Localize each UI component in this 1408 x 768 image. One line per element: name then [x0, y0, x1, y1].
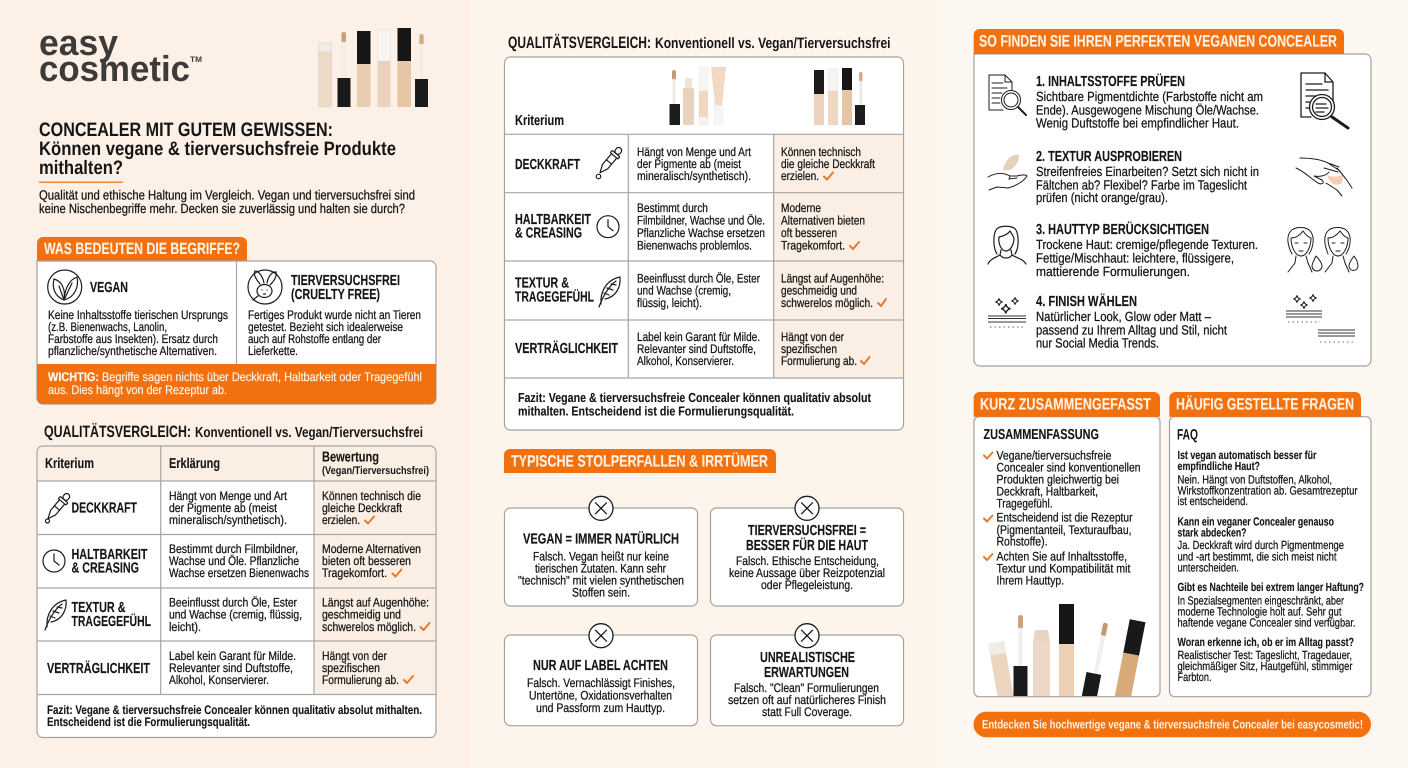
title: Können vegane & tierversuchsfreie Produkte: [39, 138, 396, 160]
table header: Erklärung: [169, 456, 220, 472]
row: texture: schwerelos möglich.: [781, 296, 873, 310]
row: tolerance: Label kein Garant für Milde.: [169, 649, 296, 663]
row: durability: Wachse ersetzen Bienenwachs: [169, 566, 309, 580]
conclusion: [47, 703, 422, 729]
FAQ 3: In Spezialsegmenten eingeschränkt, aber: [1178, 593, 1344, 607]
FAQ 1: ist entscheidend.: [1178, 494, 1248, 508]
FAQ 2: Kann ein veganer Concealer genauso: [1178, 515, 1334, 529]
FAQ 3: moderne Technologie holt auf. Sehr gut: [1178, 605, 1342, 619]
panel: FAQ: [1169, 392, 1371, 697]
table: quality comparison: [37, 446, 436, 738]
term: cruelty free: [248, 273, 421, 358]
card: unrealistic expectations: statt Full Coverage.: [762, 705, 852, 719]
card: unrealistic expectations: Falsch. "Clean" Formulierungen: [734, 681, 879, 695]
step 4: 4. FINISH WÄHLEN: [1036, 293, 1137, 310]
product photo: concealers in summary: [988, 604, 1145, 705]
icon: testing cream on skin: [1296, 158, 1352, 196]
row: texture: Längst auf Augenhöhe:: [322, 596, 429, 610]
heading: quality comparison: QUALITÄTSVERGLEICH:: [44, 422, 191, 441]
row: durability: HALTBARKEIT: [515, 212, 591, 228]
step 1: Ende). Ausgewogene Mischung Öle/Wachse.: [1036, 102, 1259, 117]
row: coverage: die gleiche Deckkraft: [781, 157, 875, 171]
card: vegan = natural: Falsch. Vegan heißt nur keine: [533, 549, 669, 563]
FAQ 2: unterscheiden.: [1178, 561, 1239, 575]
summary point 3: Textur und Kompatibilität mit: [996, 562, 1131, 576]
card: cruelty free = better for skin: keine Aussage über Reizpotenzial: [729, 566, 885, 580]
row: texture: und Wachse (cremig,: [637, 284, 731, 298]
summary heading: ZUSAMMENFASSUNG: [984, 427, 1099, 443]
card: unrealistic expectations: setzen oft auf natürlicheres Finish: [728, 693, 886, 707]
step 2: Fältchen ab? Flexibel? Farbe im Tageslicht: [1036, 177, 1247, 192]
icon: dropper: [596, 145, 624, 179]
icon: finish right: [1286, 294, 1355, 342]
row: coverage: [44, 489, 421, 527]
term: cruelty free: TIERVERSUCHSFREI: [291, 273, 400, 289]
FAQ 4: Realistischer Test: Tageslicht, Tragedauer,: [1178, 648, 1352, 662]
conclusion: Entscheidend ist die Formulierungsqualität.: [47, 715, 250, 729]
row: coverage: DECKKRAFT: [72, 501, 137, 517]
panel: terms: [37, 237, 436, 404]
summary point 3: Ihrem Hauttyp.: [996, 574, 1064, 588]
step 2: Streifenfreies Einarbeiten? Setzt sich nicht in: [1036, 164, 1259, 179]
FAQ 2: stark abdecken?: [1178, 526, 1246, 540]
card: only the label: Untertöne, Oxidationsverhalten: [529, 688, 672, 702]
table header: (Vegan/Tierversuchsfrei): [322, 465, 429, 477]
row: tolerance: spezifischen: [781, 342, 837, 356]
FAQ 1: empfindliche Haut?: [1178, 459, 1260, 473]
logo: easycosmetic: TM: [190, 55, 202, 64]
row: durability: bieten oft besseren: [322, 554, 411, 568]
card: cruelty free = better for skin: [710, 496, 904, 606]
term: vegan: VEGAN: [90, 280, 128, 296]
row: coverage: der Pigmente ab (meist: [637, 157, 741, 171]
step 2: [1036, 149, 1259, 205]
card: cruelty free = better for skin: Falsch. Ethische Entscheidung,: [736, 554, 879, 568]
card: vegan = natural: [504, 496, 698, 606]
section tab: summary: [974, 392, 1160, 417]
section tab: terms: WAS BEDEUTEN DIE BEGRIFFE?: [44, 240, 240, 258]
icon: finish left: [988, 297, 1026, 327]
term: vegan: pflanzliche/synthetische Alternativen.: [48, 344, 217, 358]
icon: feather: [45, 600, 66, 630]
summary point 2: [984, 511, 1132, 549]
row: durability: Alternativen bieten: [781, 214, 865, 228]
term: vegan: (z.B. Bienenwachs, Lanolin,: [48, 320, 167, 334]
row: durability: Tragekomfort.: [781, 238, 845, 252]
product photo: conventional concealers: [670, 67, 726, 125]
card: only the label: Falsch. Vernachlässigt Finishes,: [527, 676, 675, 690]
summary point 1: Tragegefühl.: [996, 496, 1052, 510]
table header: [45, 450, 429, 477]
row: coverage: gleiche Deckkraft: [322, 501, 402, 515]
row: tolerance: Alkohol, Konservierer.: [637, 354, 734, 368]
step 3: mattierende Formulierungen.: [1036, 264, 1190, 279]
icon: feather: [599, 277, 620, 307]
FAQ 2: und -art bestimmt, die sich meist nicht: [1178, 550, 1337, 564]
icon: cross: [795, 624, 819, 648]
summary point 1: Produkten gleichwertig bei: [996, 472, 1119, 486]
summary point 2: Rohstoffe).: [996, 535, 1048, 549]
summary point 2: (Pigmentanteil, Texturaufbau,: [996, 523, 1132, 537]
FAQ 4: Farbton.: [1178, 670, 1212, 684]
row: durability: HALTBARKEIT: [72, 547, 148, 563]
row: tolerance: spezifischen: [322, 661, 380, 675]
card: cruelty free = better for skin: BESSER FÜR DIE HAUT: [746, 537, 868, 554]
row: tolerance: Alkohol, Konservierer.: [169, 673, 269, 687]
row: texture: leicht).: [169, 620, 201, 634]
term: cruelty free: Lieferkette.: [248, 344, 298, 358]
FAQ 3: haftende vegane Concealer sind verfügbar.: [1178, 616, 1356, 630]
row: tolerance: [47, 649, 413, 687]
table header: Kriterium: [45, 456, 94, 472]
row: durability: Bestimmt durch: [637, 201, 708, 215]
card: unrealistic expectations: UNREALISTISCHE: [760, 650, 855, 666]
background: left column: [0, 0, 470, 768]
card: vegan = natural: VEGAN = IMMER NATÜRLICH: [523, 530, 679, 547]
FAQ 1: [1178, 448, 1358, 508]
row: durability: Wachse und Öle. Pflanzliche: [169, 554, 299, 568]
step 3: Fettige/Mischhaut: leichtere, flüssigere,: [1036, 250, 1234, 265]
row: texture: TEXTUR &: [515, 276, 569, 292]
summary point 1: Concealer sind konventionellen: [996, 461, 1141, 475]
row: durability: Bienenwachs problemlos.: [637, 238, 752, 252]
row: texture: geschmeidig und: [781, 284, 857, 298]
icon: dropper: [44, 491, 72, 523]
FAQ 4: Woran erkenne ich, ob er im Alltag passt?: [1178, 635, 1354, 649]
icon: cross: [589, 624, 613, 648]
row: texture: schwerelos möglich.: [322, 620, 416, 634]
heading: quality comparison: [44, 422, 423, 441]
title: CONCEALER MIT GUTEM GEWISSEN:: [39, 119, 333, 141]
card: vegan = natural: "technisch" mit vielen synthetischen: [518, 574, 684, 588]
card: unrealistic expectations: ERWARTUNGEN: [764, 665, 849, 681]
row: texture: und Wachse (cremig, flüssig,: [169, 608, 302, 622]
logo: easycosmetic: easy: [39, 22, 118, 63]
row: texture: Beeinflusst durch Öle, Ester: [637, 272, 760, 286]
icon: cross: [589, 496, 613, 520]
intro text: keine Nischenbegriffe mehr. Decken sie zuverlässig und halten sie durch?: [39, 201, 405, 216]
icon: cream on hand: [988, 155, 1027, 190]
FAQ heading: FAQ: [1177, 426, 1198, 443]
summary point 3: [984, 550, 1131, 588]
section tab: FAQ: HÄUFIG GESTELLTE FRAGEN: [1176, 395, 1354, 413]
row: texture: flüssig, leicht).: [637, 296, 702, 310]
FAQ 2: Ja. Deckkraft wird durch Pigmentmenge: [1178, 538, 1344, 552]
intro text: [39, 188, 415, 216]
row: tolerance: Relevanter sind Duftstoffe,: [169, 661, 293, 675]
step 1: 1. INHALTSSTOFFE PRÜFEN: [1036, 73, 1185, 90]
card: cruelty free = better for skin: oder Pflegeleistung.: [761, 578, 853, 592]
row: tolerance: Label kein Garant für Milde.: [637, 330, 760, 344]
FAQ 4: [1178, 635, 1354, 684]
row: durability: oft besseren: [781, 226, 837, 240]
heading: quality comparison: [508, 33, 890, 52]
row: coverage: Hängt von Menge und Art: [637, 145, 751, 159]
product photo: concealer row: [318, 28, 428, 107]
summary point 3: Achten Sie auf Inhaltsstoffe,: [996, 550, 1127, 564]
FAQ 3: [1178, 580, 1364, 630]
term: cruelty free: auch auf Rohstoffe entlang der: [248, 332, 381, 346]
table: quality comparison with products: [504, 57, 904, 430]
step 4: nur Social Media Trends.: [1036, 336, 1159, 351]
logo: easycosmetic: [39, 22, 202, 89]
card: cruelty free = better for skin: TIERVERSUCHSFREI =: [748, 523, 866, 539]
summary point 2: Entscheidend ist die Rezeptur: [996, 511, 1132, 525]
step 2: 2. TEXTUR AUSPROBIEREN: [1036, 149, 1182, 165]
row: texture: TEXTUR &: [72, 600, 126, 616]
card: only the label: NUR AUF LABEL ACHTEN: [533, 658, 668, 674]
background: middle column: [470, 0, 940, 768]
title: [39, 119, 396, 179]
row: tolerance: Formulierung ab.: [322, 673, 399, 687]
row: tolerance: Hängt von der: [322, 649, 387, 663]
icon: clock: [43, 550, 65, 572]
heading: quality comparison: QUALITÄTSVERGLEICH:: [508, 33, 651, 52]
row: durability: [515, 201, 865, 252]
row: tolerance: VERTRÄGLICHKEIT: [515, 340, 618, 357]
call to action: [974, 712, 1371, 737]
row: texture: TRAGEGEFÜHL: [72, 613, 151, 630]
row: durability: Pflanzliche Wachse ersetzen: [637, 226, 765, 240]
row: durability: Moderne: [781, 201, 821, 215]
icon: woman: [988, 226, 1026, 264]
summary point 1: [984, 449, 1141, 510]
icon: document with magnifier large: [1301, 73, 1348, 128]
step 1: Wenig Duftstoffe bei empfindlicher Haut.: [1036, 115, 1239, 130]
conclusion: Fazit: Vegane & tierversuchsfreie Concealer können qualitativ absolut mithalten.: [47, 703, 422, 717]
step 3: 3. HAUTTYP BERÜCKSICHTIGEN: [1036, 221, 1209, 238]
term: vegan: Keine Inhaltsstoffe tierischen Ursprungs: [48, 308, 228, 322]
section tab: finding: [974, 29, 1344, 54]
conclusion: [518, 390, 872, 419]
header cell: criterion: Kriterium: [515, 113, 564, 129]
row: tolerance: Hängt von der: [781, 330, 844, 344]
card: unrealistic expectations: [710, 624, 904, 726]
row: coverage: mineralisch/synthetisch).: [169, 513, 287, 527]
card: vegan = natural: Stoffen sein.: [572, 586, 630, 600]
step 3: Trockene Haut: cremige/pflegende Texturen.: [1036, 237, 1258, 252]
step 4: passend zu Ihrem Alltag und Stil, nicht: [1036, 322, 1227, 337]
panel: summary: [974, 392, 1160, 705]
row: durability: Bestimmt durch Filmbildner,: [169, 542, 298, 556]
row: durability: & CREASING: [72, 561, 139, 577]
row: texture: Längst auf Augenhöhe:: [781, 272, 884, 286]
step 2: prüfen (nicht orange/grau).: [1036, 190, 1168, 205]
card: only the label: [504, 624, 698, 726]
icon: vegan leaf: [48, 270, 82, 304]
row: coverage: der Pigmente ab (meist: [169, 501, 277, 515]
panel: finding your concealer: [974, 29, 1371, 366]
FAQ 1: Wirkstoffkonzentration ab. Gesamtrezeptur: [1178, 483, 1358, 497]
intro text: Qualität und ethische Haltung im Vergleich. Vegan und tierversuchsfrei sind: [39, 188, 415, 202]
row: durability: Tragekomfort.: [322, 566, 387, 580]
logo: easycosmetic: cosmetic: [39, 48, 190, 89]
conclusion: mithalten. Entscheidend ist die Formulierungsqualität.: [518, 404, 794, 419]
row: durability: & CREASING: [515, 226, 582, 242]
term: cruelty free: Fertiges Produkt wurde nicht an Tieren: [248, 308, 421, 322]
term: cruelty free: (CRUELTY FREE): [291, 287, 380, 303]
product photo: vegan concealers: [814, 68, 865, 125]
panel: middle column: [504, 33, 904, 726]
row: durability: Moderne Alternativen: [322, 542, 421, 556]
FAQ 4: gleichmäßiger Sitz, Hautgefühl, stimmiger: [1178, 659, 1353, 673]
row: coverage: Können technisch die: [322, 489, 421, 503]
step 1: Sichtbare Pigmentdichte (Farbstoffe nicht am: [1036, 89, 1263, 104]
callout: important: [37, 364, 436, 404]
row: texture: TRAGEGEFÜHL: [515, 289, 594, 306]
icon: two skin types: [1288, 228, 1358, 272]
term: cruelty free: getestet. Bezieht sich idealerweise: [248, 320, 403, 334]
FAQ 2: [1178, 515, 1344, 575]
FAQ 1: Nein. Hängt von Duftstoffen, Alkohol,: [1178, 472, 1332, 486]
icon: clock: [597, 216, 619, 238]
panel: left column: [37, 22, 436, 738]
row: durability: [43, 542, 421, 580]
row: coverage: Können technisch: [781, 145, 861, 159]
summary point 1: Vegane/tierversuchsfreie: [996, 449, 1112, 463]
row: tolerance: Formulierung ab.: [781, 354, 857, 368]
row: coverage: erzielen.: [781, 169, 819, 183]
step 4: Natürlicher Look, Glow oder Matt –: [1036, 309, 1212, 324]
heading: quality comparison: Konventionell vs. Vegan/Tierversuchsfrei: [655, 35, 890, 52]
icon: rabbit: [248, 270, 282, 304]
row: texture: [45, 596, 430, 634]
background: right column: [940, 0, 1408, 768]
row: coverage: Hängt von Menge und Art: [169, 489, 287, 503]
row: tolerance: [515, 330, 870, 368]
callout: important: WICHTIG: Begriffe sagen nichts über Deckkraft, Haltbarkeit oder Tragegefühl: [48, 370, 422, 384]
row: texture: geschmeidig und: [322, 608, 401, 622]
step 1: [1036, 73, 1263, 130]
row: texture: [515, 272, 886, 310]
row: coverage: DECKKRAFT: [515, 157, 580, 173]
row: tolerance: VERTRÄGLICHKEIT: [47, 660, 150, 677]
term: vegan: Farbstoffe aus Insekten). Ersatz durch: [48, 332, 218, 346]
step 3: [1036, 221, 1258, 279]
summary point 1: Deckkraft, Haltbarkeit,: [996, 485, 1098, 499]
row: durability: Filmbildner, Wachse und Öle.: [637, 214, 765, 228]
conclusion: Fazit: Vegane & tierversuchsfreie Concealer können qualitativ absolut: [518, 390, 872, 405]
FAQ 1: Ist vegan automatisch besser für: [1178, 448, 1317, 462]
card: vegan = natural: tierischen Zutaten. Kann sehr: [535, 562, 666, 576]
term: vegan: [48, 280, 228, 358]
step 4: [1036, 293, 1227, 351]
row: texture: Beeinflusst durch Öle, Ester: [169, 596, 297, 610]
panel: right column: [974, 29, 1371, 737]
section tab: pitfalls: [504, 449, 776, 473]
row: coverage: erzielen.: [322, 513, 360, 527]
callout: important: aus. Dies hängt von der Rezeptur ab.: [48, 383, 227, 397]
section tab: summary: KURZ ZUSAMMENGEFASST: [980, 395, 1151, 413]
row: coverage: [515, 145, 875, 183]
icon: cross: [795, 496, 819, 520]
section tab: pitfalls: TYPISCHE STOLPERFALLEN & IRRTÜMER: [511, 453, 768, 471]
heading: quality comparison: Konventionell vs. Vegan/Tierversuchsfrei: [195, 425, 423, 441]
title: mithalten?: [39, 157, 123, 179]
row: tolerance: Relevanter sind Duftstoffe,: [637, 342, 756, 356]
row: coverage: mineralisch/synthetisch).: [637, 169, 751, 183]
icon: document with magnifier: [989, 75, 1026, 115]
card: only the label: und Passform zum Hauttyp.: [536, 701, 665, 715]
section tab: terms: [37, 237, 247, 261]
table header: Bewertung: [322, 450, 379, 466]
section tab: FAQ: [1169, 392, 1361, 417]
